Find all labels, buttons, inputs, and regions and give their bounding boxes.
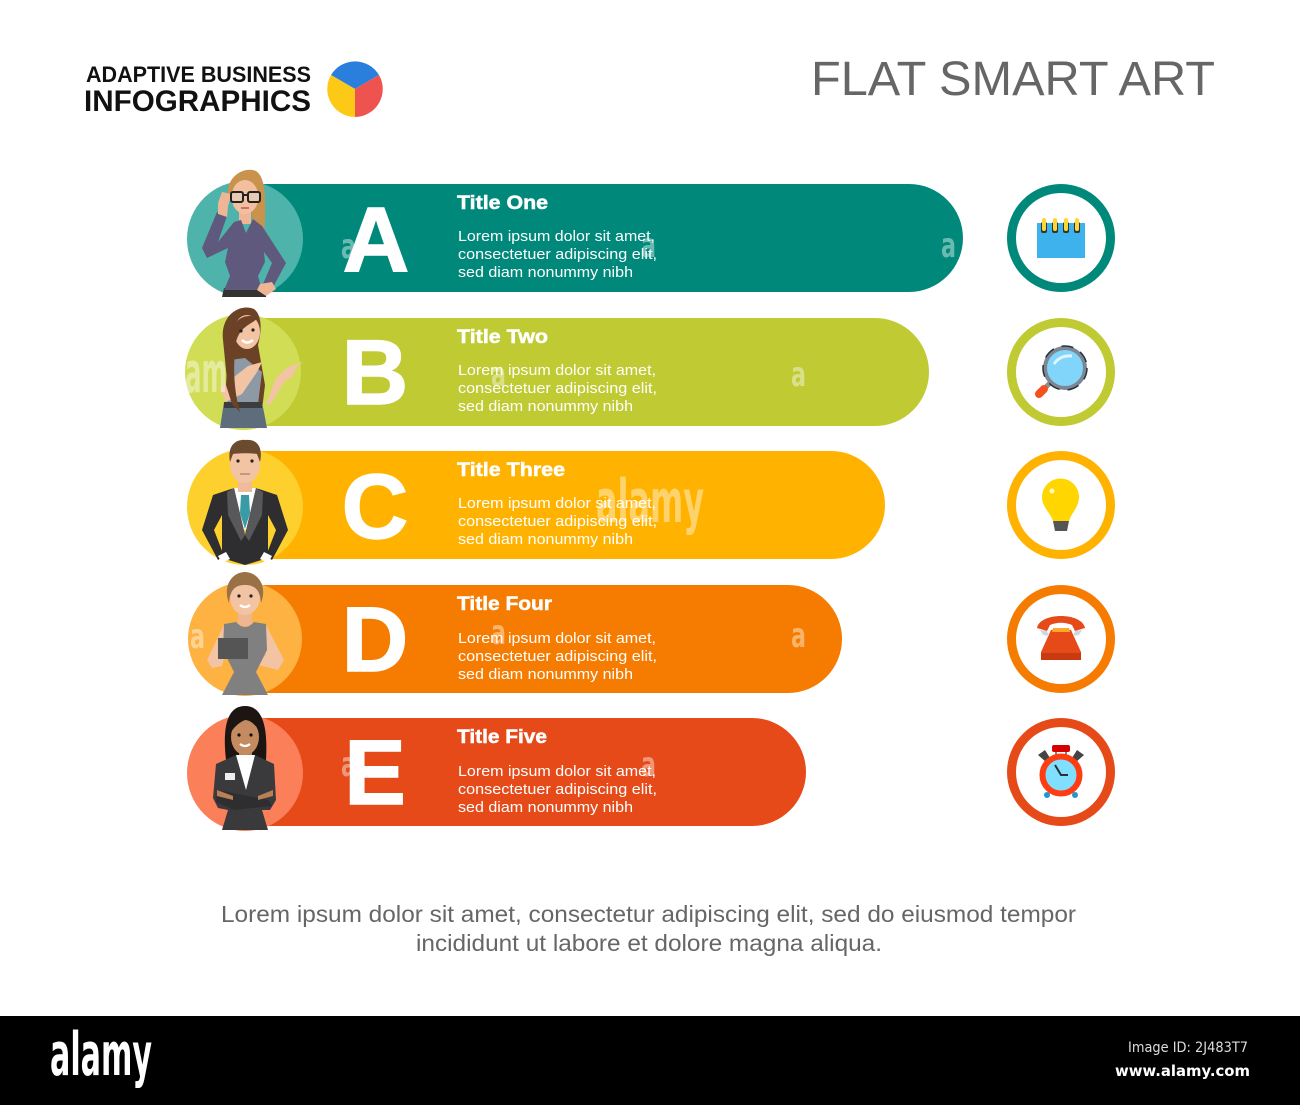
ring icon B: magnifier [1012,322,1110,422]
text block C [457,460,657,548]
watermark overlay: am [185,341,227,406]
ring icon A: notepad [1012,188,1110,288]
website: www.alamy.com [1115,1062,1250,1080]
text block B [457,327,657,415]
row B [185,307,1110,430]
text block D [457,594,657,683]
footer caption [221,901,1076,956]
logo text: INFOGRAPHICS [84,85,311,118]
watermark overlay: a [641,745,656,785]
text block E [457,727,657,816]
watermark overlay: a [341,227,356,267]
row C [187,440,1110,565]
footer caption: incididunt ut labore et dolore magna aliqua. [416,930,882,956]
letter C: C [342,456,408,558]
text block A: Lorem ipsum dolor sit amet, [458,228,655,245]
watermark overlay: alamy [596,467,704,537]
text block C: Title Three [457,460,565,481]
row E [187,706,1110,831]
logo [84,61,383,118]
avatar circle A [187,181,303,297]
row D [188,572,1110,696]
avatar circle D [188,582,302,696]
ring icon D: telephone [1012,590,1110,688]
person C [202,440,288,565]
ring icon E: alarm clock [1012,722,1110,822]
person E [213,706,276,830]
watermark overlay: a [791,355,806,395]
text block B: sed diam nonummy nibh [458,398,633,415]
watermark overlay [185,226,956,785]
text block D: Lorem ipsum dolor sit amet, [458,630,656,647]
logo text [84,62,311,118]
letter B: B [342,322,408,424]
bar E [245,718,806,826]
ring icon C: light bulb [1012,456,1110,554]
logo text: ADAPTIVE BUSINESS [86,62,311,87]
letter E: E [344,722,406,824]
watermark overlay: a [791,616,806,656]
text block A: sed diam nonummy nibh [458,264,633,281]
text block D: consectetuer adipiscing elit, [458,648,657,665]
bar D [245,585,842,693]
text block C: consectetuer adipiscing elit, [458,513,657,530]
text block D: sed diam nonummy nibh [458,666,633,683]
bar A [245,184,963,292]
watermark overlay: a [491,355,506,395]
text block B: Lorem ipsum dolor sit amet, [458,362,656,379]
avatar circle C [187,449,303,565]
logo pie icon [327,61,383,117]
text block E: sed diam nonummy nibh [458,799,633,816]
text block D: Title Four [457,594,553,615]
text block C: Lorem ipsum dolor sit amet, [458,495,656,512]
text block A: consectetuer adipiscing elit, [458,246,657,263]
text block E: Title Five [457,727,547,748]
alamy logo: alamy [50,1020,152,1090]
text block C: sed diam nonummy nibh [458,531,633,548]
person A [202,170,286,297]
letter A: A [343,189,409,291]
stock photo footer band [0,1016,1300,1105]
text block B: consectetuer adipiscing elit, [458,380,657,397]
letter D: D [342,589,408,691]
watermark overlay: a [341,745,356,785]
text block A: Title One [457,193,548,214]
row A [187,170,1110,297]
main heading: FLAT SMART ART [811,53,1215,106]
watermark overlay: a [641,226,656,266]
text block E: Lorem ipsum dolor sit amet, [458,763,656,780]
person D [207,572,284,695]
avatar circle E [187,715,303,831]
watermark overlay: a [190,617,205,657]
text block E: consectetuer adipiscing elit, [458,781,657,798]
text block B: Title Two [457,327,548,348]
bar C [245,451,885,559]
watermark overlay: a [941,226,956,266]
footer caption: Lorem ipsum dolor sit amet, consectetur adipiscing elit, sed do eiusmod tempor [221,901,1076,927]
person B [220,307,303,428]
bar B [245,318,929,426]
text block A [457,193,657,281]
watermark overlay: a [491,613,506,653]
image id: Image ID: 2J483T7 [1128,1040,1248,1056]
avatar circle B [185,314,301,430]
